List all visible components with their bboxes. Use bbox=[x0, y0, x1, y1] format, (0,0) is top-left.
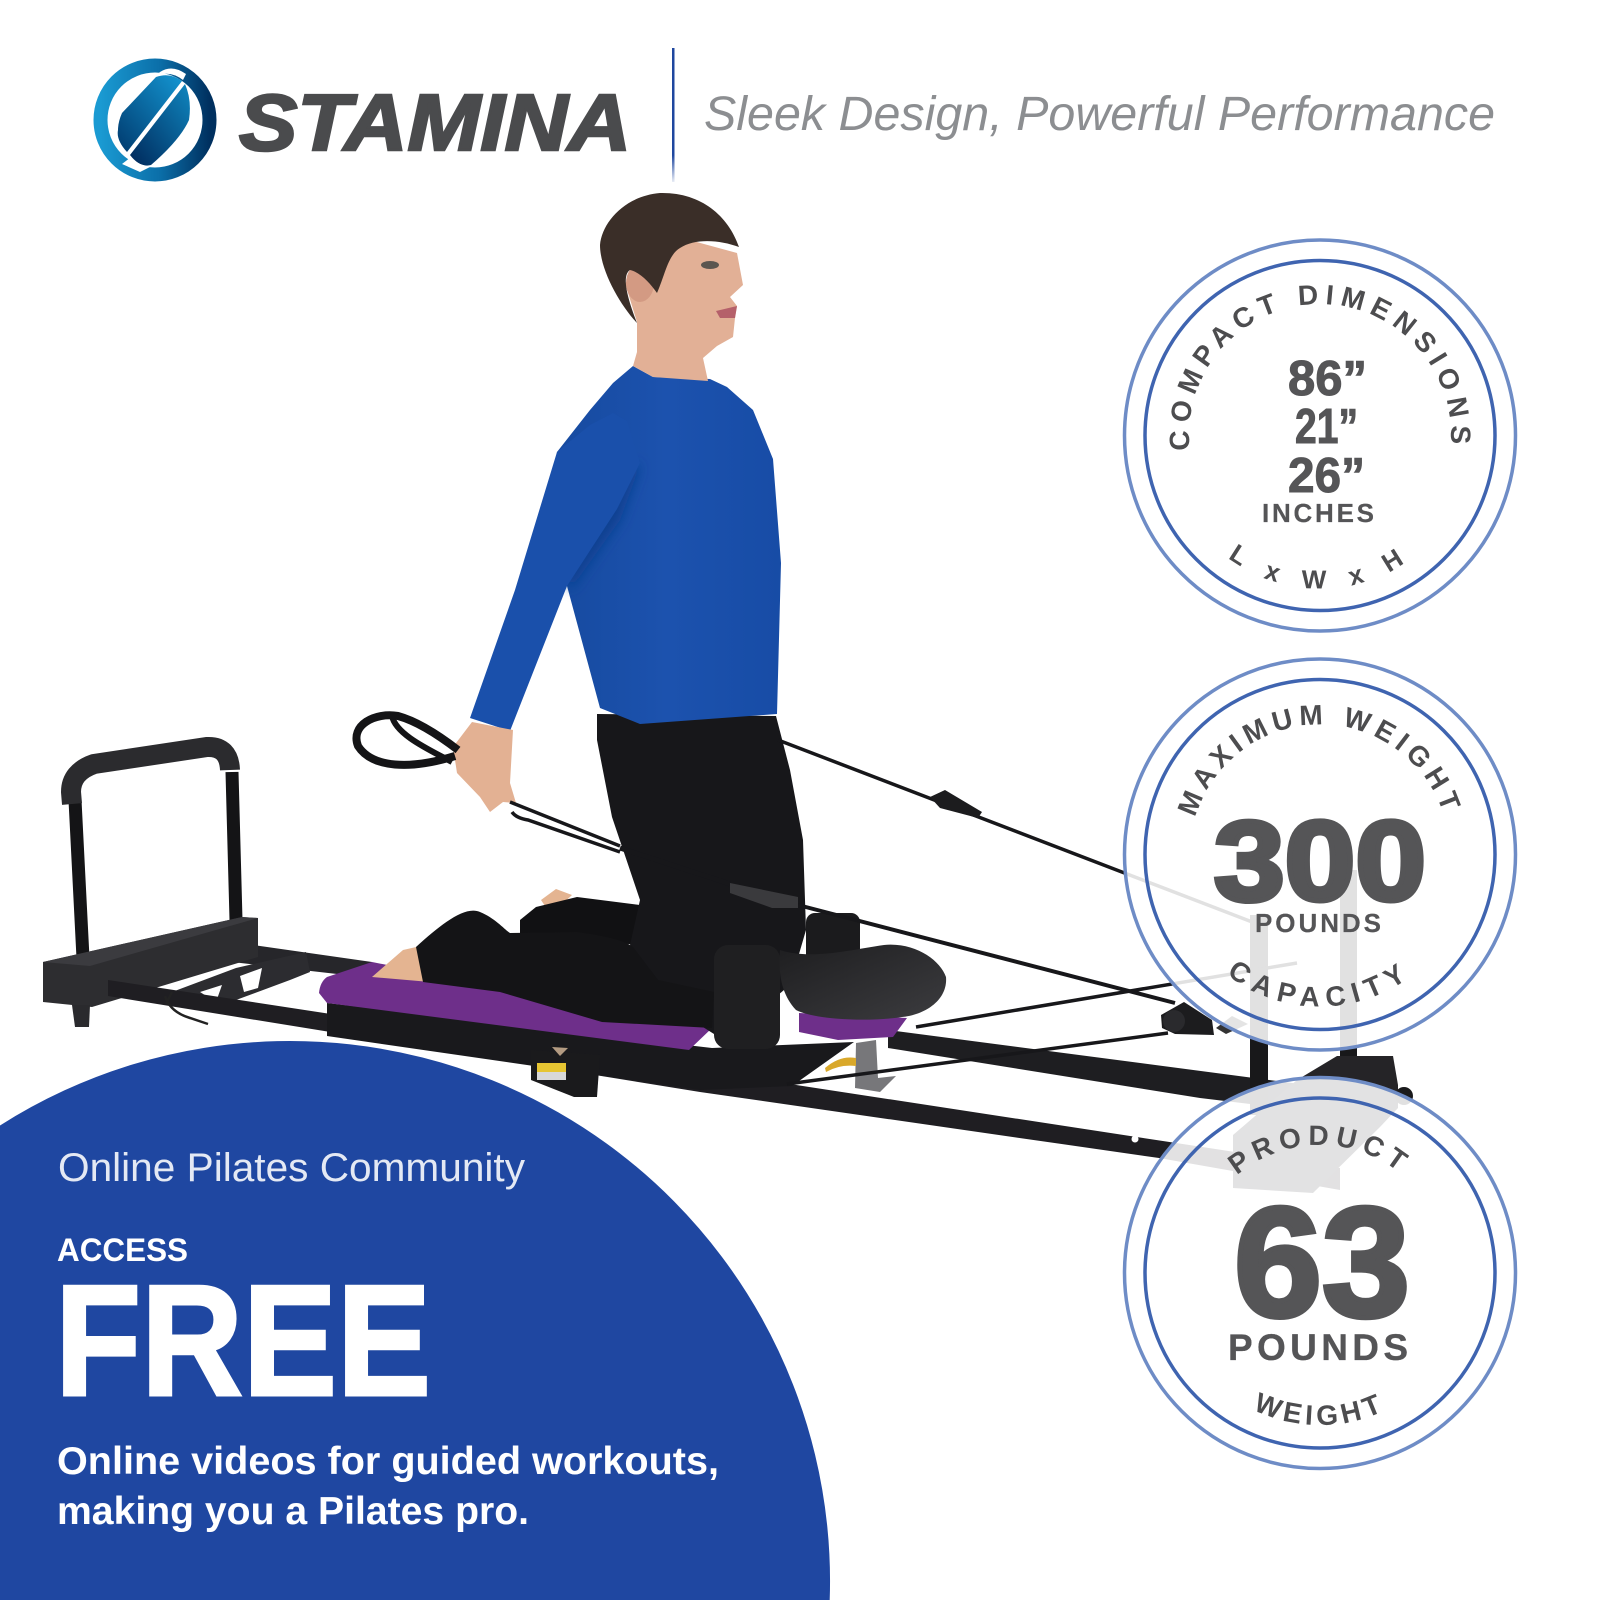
shirt bbox=[470, 366, 781, 731]
curved label bottom: CAPACITY bbox=[1230, 962, 1402, 1006]
curved label top: PRODUCT bbox=[1227, 1126, 1410, 1174]
panel background bbox=[0, 1041, 830, 1600]
curved label top: COMPACT DIMENSIONS bbox=[1170, 285, 1471, 450]
hair bbox=[600, 193, 739, 323]
curved label bottom: L x W x H bbox=[1229, 544, 1404, 588]
dimensions values: 86” bbox=[1288, 352, 1367, 406]
badge rings bbox=[1124, 659, 1516, 1050]
access label: ACCESS bbox=[57, 1232, 188, 1268]
caution housing bbox=[531, 1047, 600, 1097]
capacity value: 300 bbox=[1214, 798, 1426, 924]
cable clasp bbox=[930, 790, 982, 818]
unit: POUNDS bbox=[1255, 908, 1381, 938]
header logo: Stamina bbox=[100, 66, 631, 174]
black pants bbox=[597, 714, 806, 1034]
pin and cord bbox=[165, 992, 208, 1024]
photo: woman kneeling on pilates reformer bbox=[43, 193, 1413, 1193]
dimensions values bbox=[1262, 352, 1374, 528]
curved label bottom: WEIGHT bbox=[1257, 1392, 1377, 1426]
head end box bbox=[1233, 1056, 1398, 1193]
carriage support strut bbox=[855, 1040, 896, 1092]
back rail right bbox=[888, 1030, 1300, 1110]
panel description: making you a Pilates pro. bbox=[57, 1490, 529, 1533]
reformer frame bbox=[43, 747, 1413, 1193]
feet bbox=[372, 889, 572, 982]
panel description: Online videos for guided workouts, bbox=[57, 1440, 719, 1483]
unit: POUNDS bbox=[1228, 1327, 1408, 1368]
purple seat pad bbox=[319, 962, 712, 1050]
badge: maximum weight capacity bbox=[1122, 657, 1518, 1052]
icon: logo emblem bbox=[100, 66, 210, 174]
badge: product weight bbox=[1122, 1076, 1518, 1470]
lips and eye bbox=[701, 261, 737, 318]
strap loop bbox=[356, 715, 458, 765]
front leg warmer bbox=[416, 911, 714, 1028]
foam block rear bbox=[806, 913, 860, 963]
handle bar bbox=[71, 747, 236, 958]
resistance cables bbox=[510, 740, 1297, 1084]
foot end box bbox=[43, 917, 258, 1027]
panel overline: Online Pilates Community bbox=[58, 1146, 525, 1190]
panel description bbox=[57, 1440, 719, 1533]
front rail bbox=[108, 980, 1340, 1190]
ear bbox=[626, 264, 654, 302]
logo wordmark: STAMINA bbox=[239, 78, 631, 167]
cable grip bbox=[730, 883, 798, 908]
rear leg warmer bbox=[520, 897, 640, 945]
neck and face bbox=[625, 241, 743, 381]
panel: free online community bbox=[0, 1041, 830, 1600]
foam block front bbox=[714, 945, 780, 1049]
hand bbox=[453, 722, 516, 812]
badge rings bbox=[1124, 1078, 1516, 1468]
tagline: Sleek Design, Powerful Performance bbox=[704, 88, 1495, 141]
header divider bbox=[672, 48, 674, 182]
carriage bbox=[327, 1003, 854, 1090]
back rail left and slide brackets bbox=[232, 942, 372, 978]
pulley bbox=[1161, 1002, 1248, 1035]
free headline: FREE bbox=[55, 1253, 431, 1429]
dimensions values: 21” bbox=[1295, 400, 1358, 454]
badge: compact dimensions bbox=[1122, 238, 1518, 633]
weight value: 63 bbox=[1234, 1176, 1410, 1350]
posts bbox=[1250, 870, 1357, 1115]
dimensions values: 26” bbox=[1288, 449, 1365, 503]
dimensions values: INCHES bbox=[1262, 498, 1374, 528]
curved label top: MAXIMUM WEIGHT bbox=[1178, 705, 1461, 816]
shoulder bolster bbox=[780, 945, 946, 1040]
badge rings bbox=[1124, 240, 1516, 631]
